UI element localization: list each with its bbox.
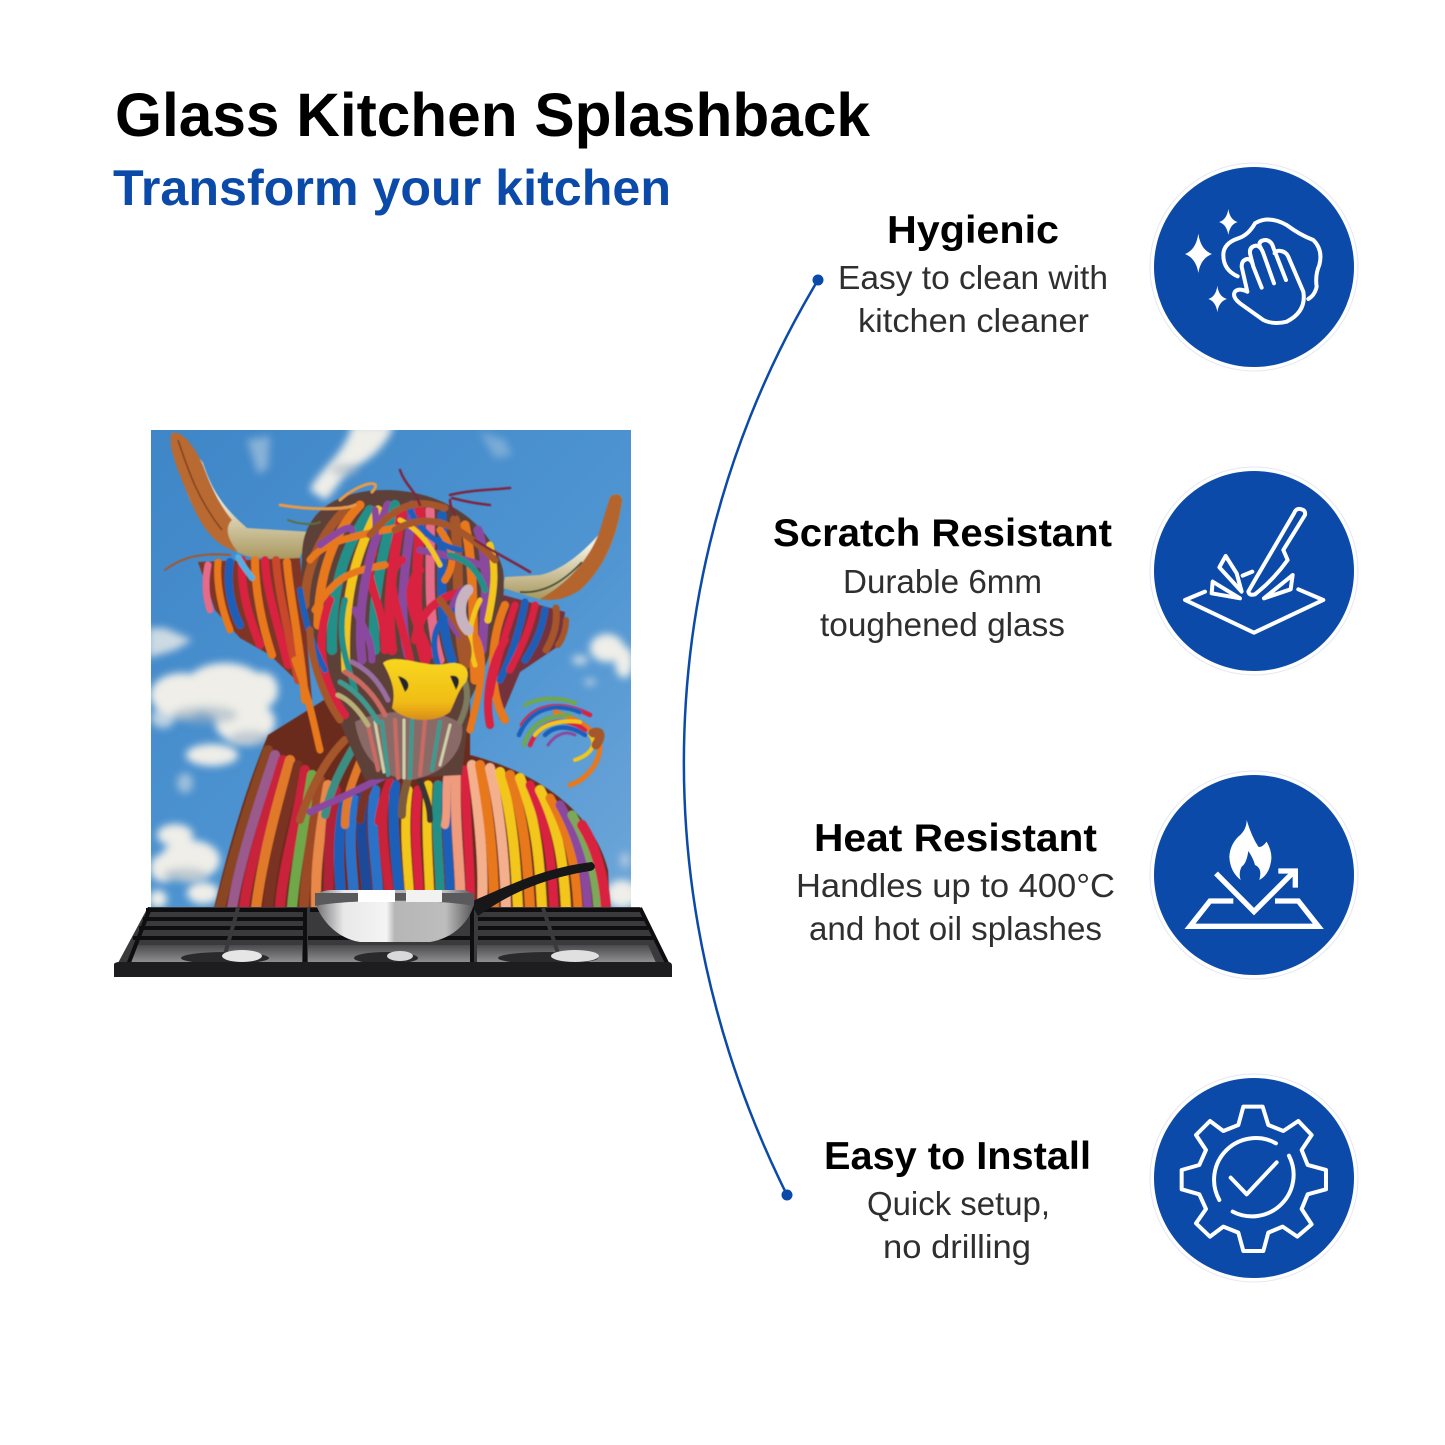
text: easy to install description — [867, 1185, 1050, 1265]
left horn — [171, 433, 312, 561]
product image: splashback with highland cow above a gas hob — [114, 425, 672, 977]
text: easy to install description: Quick setup, — [867, 1185, 1050, 1222]
feature: hygienic — [838, 209, 1108, 339]
highland cow artwork — [165, 433, 622, 908]
heading: scratch resistant: Scratch Resistant — [773, 512, 1112, 555]
text: scratch resistant description — [820, 563, 1065, 643]
text: hygienic description: Easy to clean with — [838, 259, 1108, 296]
text: heat resistant description — [796, 867, 1115, 947]
text: scratch resistant description: toughened glass — [820, 606, 1065, 643]
feature: heat resistant — [796, 817, 1115, 947]
icon: flame over surface with arrow — [1150, 771, 1358, 979]
text: easy to install description: no drilling — [883, 1228, 1031, 1265]
cow head — [301, 490, 504, 780]
text: heat resistant description: and hot oil splashes — [809, 910, 1102, 947]
burners — [181, 950, 599, 964]
heading: hygienic: Hygienic — [887, 209, 1059, 252]
text: hygienic description — [838, 259, 1108, 339]
text: heat resistant description: Handles up to 400°C — [796, 867, 1115, 904]
head ribbons — [280, 470, 530, 750]
feature: scratch resistant — [773, 512, 1112, 643]
cow tail — [519, 699, 600, 785]
icon: gear with check mark — [1150, 1074, 1358, 1282]
cow nose — [383, 659, 468, 720]
heading: heat resistant: Heat Resistant — [814, 817, 1097, 860]
cow chin stripes — [338, 662, 467, 780]
text: hygienic description: kitchen cleaner — [858, 302, 1089, 339]
connector curve with end dots — [684, 274, 824, 1200]
hob silver panels — [130, 945, 657, 965]
cow body — [214, 690, 610, 908]
icon: hand wiping with sparkles — [1150, 163, 1358, 371]
text: scratch resistant description: Durable 6mm — [843, 563, 1042, 600]
icon: knife scratching a surface — [1150, 467, 1358, 675]
feature: easy to install — [824, 1135, 1091, 1265]
subtitle: Transform your kitchen — [113, 160, 671, 216]
hob grate bars — [128, 908, 668, 965]
title: Glass Kitchen Splashback — [115, 81, 870, 149]
gas hob — [114, 907, 672, 977]
heading: easy to install: Easy to Install — [824, 1135, 1091, 1178]
ear fringe ribbons — [165, 554, 566, 720]
splashback panel — [148, 425, 638, 908]
frying pan — [315, 862, 595, 942]
right horn — [503, 494, 622, 600]
